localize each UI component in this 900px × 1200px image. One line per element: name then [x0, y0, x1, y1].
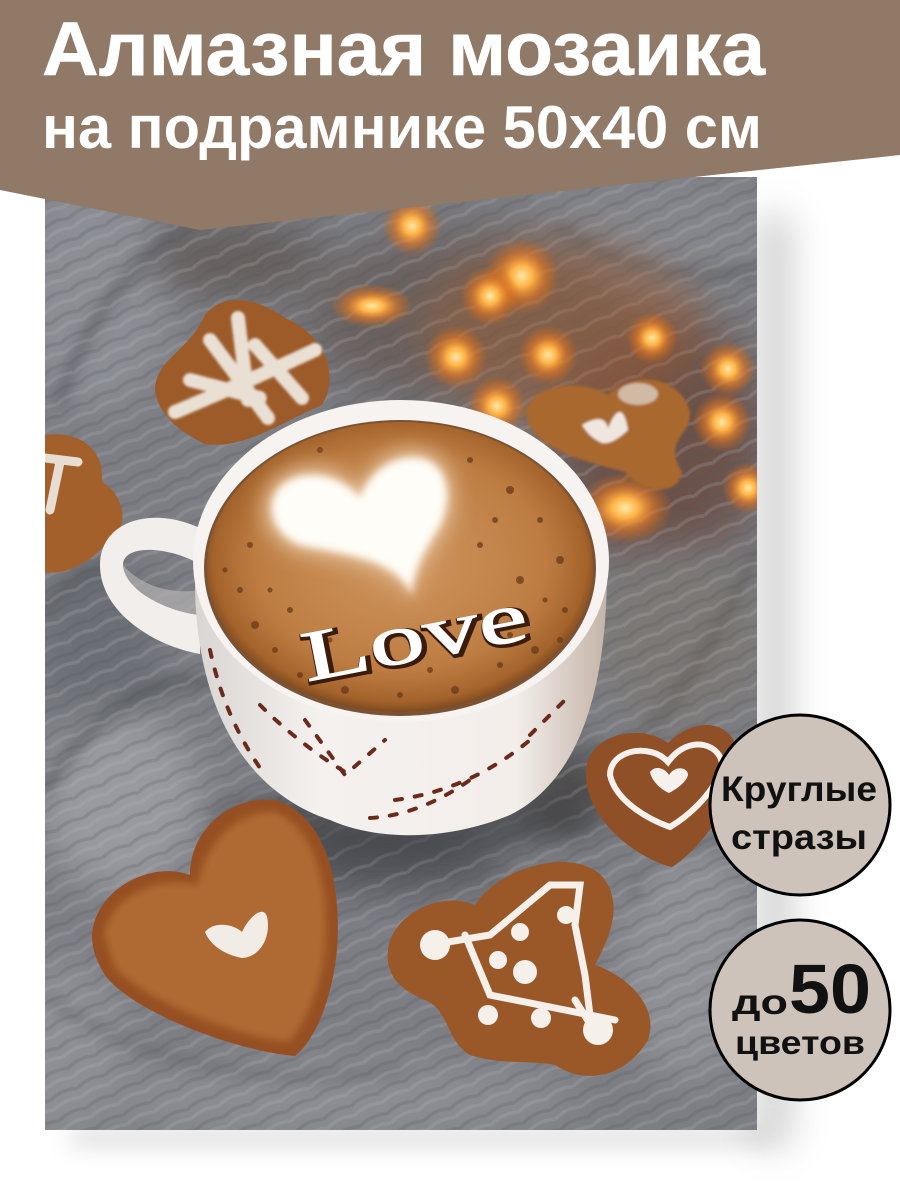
mug shadow — [210, 786, 590, 854]
latte lettering: Love — [295, 575, 534, 697]
foam spots — [222, 447, 568, 698]
latte heart — [264, 449, 454, 604]
blanket folds — [45, 225, 757, 1077]
title line 1: Алмазная мозаика — [42, 7, 766, 92]
knitted blanket background — [45, 177, 757, 1130]
cookie: left edge — [45, 434, 122, 573]
badge: up to 50 colours: цветов — [735, 1024, 865, 1061]
mug handle — [100, 518, 200, 654]
cookie: small iced heart — [586, 725, 738, 867]
canvas side shadow — [70, 215, 791, 1145]
cookie: top left snowflake — [155, 300, 330, 445]
cookie: large heart — [92, 800, 338, 1056]
mug rim — [193, 400, 609, 722]
latte lettering: Love — [297, 577, 536, 699]
badge: up to 50 colours: 50 — [789, 950, 871, 1028]
canvas photo — [45, 177, 757, 1130]
cookie: iced gingerbread — [388, 862, 650, 1076]
latte lettering — [299, 607, 531, 686]
badge: up to 50 colours: до — [732, 983, 788, 1022]
cookie: right gingerbread — [526, 380, 690, 489]
badge: up to 50 colours — [710, 920, 890, 1100]
title banner — [0, 0, 900, 230]
title line 2: на подрамнике 50х40 см — [42, 94, 762, 161]
coffee mug — [100, 400, 609, 854]
mug speckles — [210, 650, 565, 818]
badge: round rhinestones — [710, 715, 890, 895]
mug body — [195, 580, 607, 835]
coffee surface — [207, 422, 593, 712]
fairy lights — [330, 196, 774, 544]
badge: round rhinestones: стразы — [731, 818, 867, 857]
badge: round rhinestones: Круглые — [721, 770, 877, 809]
